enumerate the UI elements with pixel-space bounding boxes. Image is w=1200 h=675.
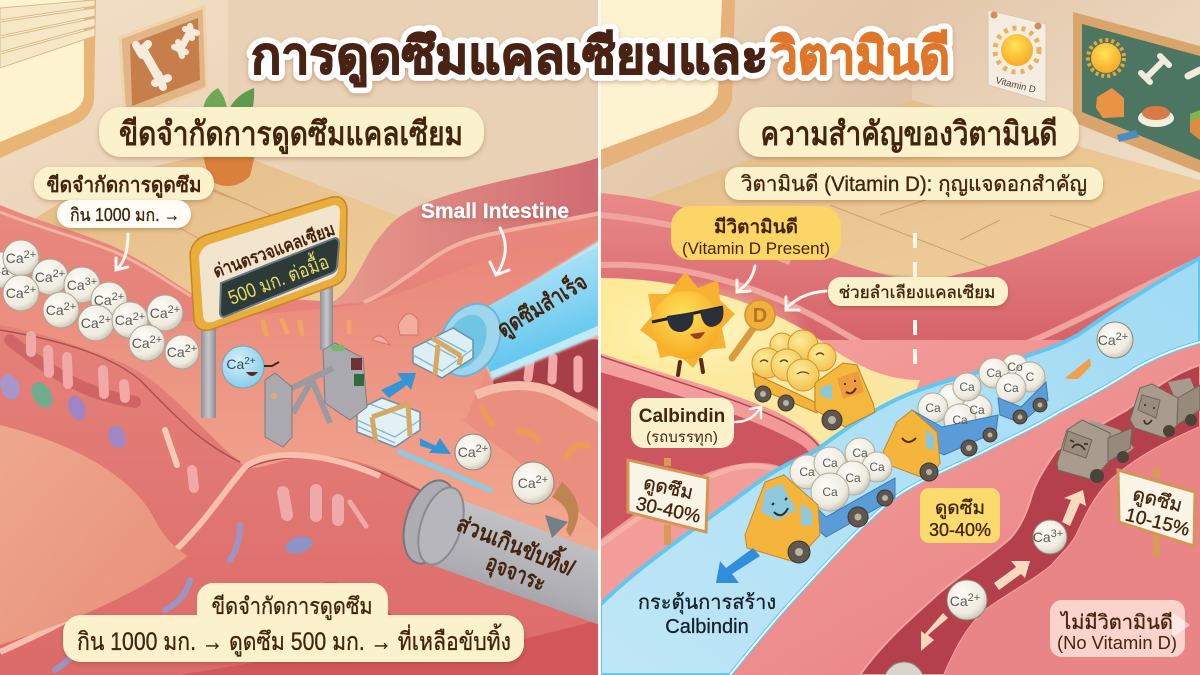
wooden sign: 10-15 percent: ดูดซึม xyxy=(1130,484,1184,517)
calcium excess balls xyxy=(455,434,554,504)
text: excess excreted: ส่วนเกินขับทิ้ง/ xyxy=(453,506,581,581)
title: วิตามินดี xyxy=(770,28,950,84)
blue river xyxy=(600,258,1200,675)
calcium balls queue: Ca xyxy=(150,305,168,321)
callout: vitamin D present: (Vitamin D Present) xyxy=(682,239,830,258)
subheading pill xyxy=(725,167,1103,200)
truck: blue middle with trailer: Ca xyxy=(986,366,1002,380)
truck: blue front xyxy=(745,438,895,563)
arrow: to sun xyxy=(737,266,755,292)
blue calcium character: 2+ xyxy=(244,356,256,367)
icon: chalk bone xyxy=(1141,56,1169,82)
right floor planks xyxy=(830,195,1130,275)
calcium excess balls: 2+ xyxy=(476,443,488,455)
key with letter D: D xyxy=(753,305,767,327)
centre divider xyxy=(598,0,601,675)
calcium balls queue: 2+ xyxy=(99,314,111,326)
callout: eat 1000 mg xyxy=(57,200,191,228)
text: calcium checkpoint: ด่านตรวจแคลเซียม xyxy=(210,219,338,282)
background: right wall xyxy=(600,0,912,300)
wooden sign: 10-15 percent xyxy=(1118,468,1195,557)
lower left lumen xyxy=(0,425,188,645)
text: absorbed successfully: ดูดซึมสำเร็จ xyxy=(491,267,592,344)
key with letter D xyxy=(732,300,775,358)
blue calcium character xyxy=(222,346,279,388)
calcium balls queue: Ca xyxy=(132,335,150,351)
blue streak xyxy=(400,452,490,490)
truck: blue middle with trailer xyxy=(883,354,1048,481)
calcium balls queue: Ca xyxy=(81,315,99,331)
arrow: small intestine xyxy=(490,228,509,275)
window xyxy=(0,0,96,158)
tissue right fold xyxy=(462,339,600,530)
wooden sign: 30-40 percent xyxy=(628,458,708,545)
callout: absorption 30-40 xyxy=(920,488,1000,543)
orange arrow in river xyxy=(1065,358,1091,379)
room floor xyxy=(0,150,440,345)
truck: blue middle with trailer: Ca xyxy=(969,403,985,417)
callout: calbindin truck xyxy=(631,398,734,448)
sun legs xyxy=(678,360,703,375)
sun rays xyxy=(640,272,735,368)
bacteria small near top xyxy=(263,320,349,334)
truck: blue front: Ca xyxy=(822,456,838,470)
icon: green bowl xyxy=(1190,110,1200,140)
icon: bone large xyxy=(136,44,168,87)
arrows along channel xyxy=(921,490,1086,651)
excess tube xyxy=(394,474,600,625)
dashed divider xyxy=(913,233,917,372)
text: feces: อุจจาระ xyxy=(482,549,550,598)
channel calcium balls: 3+ xyxy=(1051,528,1063,540)
brown swirl arrow xyxy=(545,482,578,538)
grey tube cap xyxy=(394,474,466,570)
callout: no vitamin D: ไม่มีวิตามินดี xyxy=(1059,611,1173,634)
text: summary heading: ขีดจำกัดการดูดซึม xyxy=(212,593,372,620)
label: stimulate calbindin: Calbindin xyxy=(665,616,749,638)
calcium balls queue: 2+ xyxy=(24,249,36,261)
truck: blue middle with trailer: Ca xyxy=(959,380,975,394)
truck: blue middle with trailer: Ca xyxy=(952,413,968,427)
intestine hump xyxy=(325,157,600,306)
callout: no vitamin D xyxy=(1050,600,1185,657)
fold villi xyxy=(528,358,578,388)
truck: blue front: Ca xyxy=(845,471,861,485)
heading right pill: ความสำคัญของวิตามินดี xyxy=(760,115,1058,153)
text: 500 mg per meal: 500 มก. ต่อมื้อ xyxy=(224,247,332,310)
callout: absorption limit xyxy=(34,167,214,200)
calcium balls queue: 2+ xyxy=(53,268,65,280)
intestine tissue xyxy=(0,157,600,675)
dark pit xyxy=(600,372,816,540)
package top xyxy=(413,328,473,378)
yellow glow xyxy=(590,280,810,380)
callout: no vitamin D: (No Vitamin D) xyxy=(1057,633,1177,653)
title: การดูดซึมแคลเซียมและ xyxy=(251,28,768,87)
watermark play glyph xyxy=(1172,612,1190,638)
calcium excess balls: 2+ xyxy=(536,474,548,486)
grey tube body xyxy=(418,488,600,625)
calcium balls queue: 2+ xyxy=(133,311,145,323)
truck: blue middle with trailer: C xyxy=(1026,370,1035,384)
upper band highlight xyxy=(600,215,1200,366)
calcium balls queue: 3+ xyxy=(85,276,97,288)
checkpoint sign xyxy=(190,197,347,330)
calcium balls queue: Ca xyxy=(67,277,85,293)
intestine lumen floor xyxy=(0,225,600,600)
sun face xyxy=(652,291,720,359)
truck: sun yellow xyxy=(752,330,875,430)
light wall band xyxy=(0,455,380,652)
calcium balls queue xyxy=(0,240,199,369)
intestine hump edge xyxy=(364,213,600,302)
arrow: calbindin xyxy=(735,407,761,422)
callout: helps transport calcium: ช่วยลำเลียงแคลเซียม xyxy=(839,283,995,302)
callout: calbindin truck: (รถบรรทุก) xyxy=(646,429,718,447)
tube opening xyxy=(427,293,513,387)
lower base xyxy=(600,340,1200,675)
title: วิตามินดี xyxy=(770,28,950,84)
blue absorption tube xyxy=(427,240,600,387)
fold interior xyxy=(493,339,600,410)
turnstile gate xyxy=(265,343,367,447)
floor planks xyxy=(130,175,345,290)
poster: vitamin D xyxy=(988,10,1046,102)
icon: chalk sun xyxy=(1088,40,1124,76)
calcium balls queue: 2+ xyxy=(112,291,124,303)
wall plaque with bones xyxy=(120,7,207,119)
heading left pill: ขีดจำกัดการดูดซึมแคลเซียม xyxy=(119,115,463,155)
calcium balls queue: Ca xyxy=(6,285,24,301)
calcium ball in river: Ca xyxy=(1098,332,1116,348)
calcium balls queue: Ca xyxy=(94,292,112,308)
label: small intestine: Small Intestine xyxy=(421,200,569,223)
right window xyxy=(600,0,735,170)
upper intestine band xyxy=(600,190,1200,380)
wooden sign: 30-40 percent: ดูดซึม xyxy=(641,473,695,504)
calcium balls queue: 2+ xyxy=(24,284,36,296)
lower right shade xyxy=(944,427,1200,675)
background: room wall xyxy=(0,0,600,300)
calcium excess balls: Ca xyxy=(458,444,476,460)
panel: right vitamin D scene xyxy=(590,0,1200,675)
yellow path xyxy=(600,278,920,470)
calcium balls queue: 2+ xyxy=(185,343,197,355)
subheading pill: วิตามินดี (Vitamin D): กุญแจดอกสำคัญ xyxy=(741,173,1087,197)
window blinds xyxy=(0,0,95,68)
tissue cells xyxy=(0,372,315,670)
truck: blue middle with trailer: Ca xyxy=(1003,381,1019,395)
panel: left absorption limit scene xyxy=(0,0,600,675)
calcium balls queue: Ca xyxy=(167,344,185,360)
title: การดูดซึมแคลเซียมและ xyxy=(251,28,768,87)
plant pot xyxy=(202,88,255,186)
callout: calbindin truck: Calbindin xyxy=(639,406,725,427)
icon: bone small xyxy=(174,26,197,56)
villi upper center xyxy=(372,314,418,345)
label: stimulate calbindin: กระตุ้นการสร้าง xyxy=(638,592,776,615)
callout: vitamin D present: มีวิตามินดี xyxy=(714,216,798,238)
channel calcium balls: Ca xyxy=(1033,529,1051,545)
calcium balls queue: Ca xyxy=(115,312,133,328)
eraser xyxy=(1117,130,1139,142)
wall corner shading xyxy=(228,0,600,215)
calcium ball in river: 2+ xyxy=(1116,331,1128,343)
arrow: blue stimulate xyxy=(716,548,760,583)
truck: grey rear xyxy=(1130,378,1200,438)
dark channel xyxy=(860,365,1200,675)
fold rim xyxy=(476,386,600,418)
fold rim xyxy=(600,466,800,545)
calcium balls queue: Ca xyxy=(6,250,24,266)
truck: blue front: Ca xyxy=(799,465,815,479)
orange bacteria xyxy=(482,408,588,458)
callout: absorption 30-40: 30-40% xyxy=(929,520,991,540)
tube glow xyxy=(470,240,600,380)
calcium balls queue: 2+ xyxy=(168,304,180,316)
callout: eat 1000 mg: กิน 1000 มก. → xyxy=(70,205,180,225)
truck: blue front: Ca xyxy=(869,460,885,474)
icon: milk carton xyxy=(1096,88,1124,118)
blue calcium character: Ca xyxy=(226,356,244,372)
cap ring xyxy=(410,482,472,570)
sun smile xyxy=(690,332,705,339)
arrow: blue lower right xyxy=(421,440,449,453)
calcium balls queue: 2+ xyxy=(64,301,76,313)
sunglasses xyxy=(652,307,724,332)
package bottom xyxy=(357,398,420,447)
text: poster caption: Vitamin D xyxy=(994,75,1037,96)
icon: salmon dish xyxy=(1138,106,1174,127)
outline of lumen xyxy=(0,330,440,500)
bottom tunnel xyxy=(280,582,410,650)
arrow: blue up right xyxy=(381,373,416,398)
intestine upper wall edge xyxy=(0,212,191,296)
calcium balls queue: Ca xyxy=(46,302,64,318)
fold outlines xyxy=(600,356,823,480)
summary pills xyxy=(63,583,524,662)
truck: blue middle with trailer: Co xyxy=(1007,360,1023,374)
channel calcium balls: 2+ xyxy=(968,592,980,604)
villi bottom centre xyxy=(283,490,366,526)
callout: helps transport calcium xyxy=(828,277,1008,306)
channel calcium balls: Ca xyxy=(950,593,968,609)
arrow: to key xyxy=(786,291,826,310)
truck: blue middle with trailer: Ca xyxy=(925,401,941,415)
tube body xyxy=(466,245,600,372)
sign posts xyxy=(201,280,333,418)
arrow: to calcium queue xyxy=(116,234,128,270)
truck: blue front: Ca xyxy=(822,485,838,499)
wooden sign: 30-40 percent: 30-40% xyxy=(634,494,702,528)
calcium balls queue: Ca xyxy=(35,269,53,285)
callout: absorption 30-40: ดูดซึม xyxy=(935,498,985,519)
calcium excess balls: Ca xyxy=(518,475,536,491)
heading left pill xyxy=(99,107,484,157)
truck: grey front xyxy=(1057,420,1134,483)
truck: blue front: Ca xyxy=(852,446,868,460)
icon: poster sun xyxy=(995,28,1039,72)
sun character xyxy=(640,272,735,375)
text: summary line: กิน 1000 มก. → ดูดซึม 500 มก. → ที่เหลือขับทิ้ง xyxy=(77,623,511,657)
calcium balls queue: 2+ xyxy=(150,334,162,346)
wooden sign: 10-15 percent: 10-15% xyxy=(1123,505,1192,541)
calcium ball in river xyxy=(1097,322,1133,358)
icon: chalk bone 2 xyxy=(1188,70,1200,76)
channel calcium balls xyxy=(884,520,1067,675)
villi left xyxy=(10,336,194,488)
callout: absorption limit: ขีดจำกัดการดูดซึม xyxy=(46,173,202,199)
lower left pink xyxy=(600,467,790,640)
label: stimulate calbindin xyxy=(638,592,776,638)
heading right pill xyxy=(739,107,1079,157)
river lower edge highlight xyxy=(730,342,1200,675)
chalkboard xyxy=(1073,12,1200,173)
callout: vitamin D present xyxy=(671,206,841,260)
right floor xyxy=(600,100,1200,280)
